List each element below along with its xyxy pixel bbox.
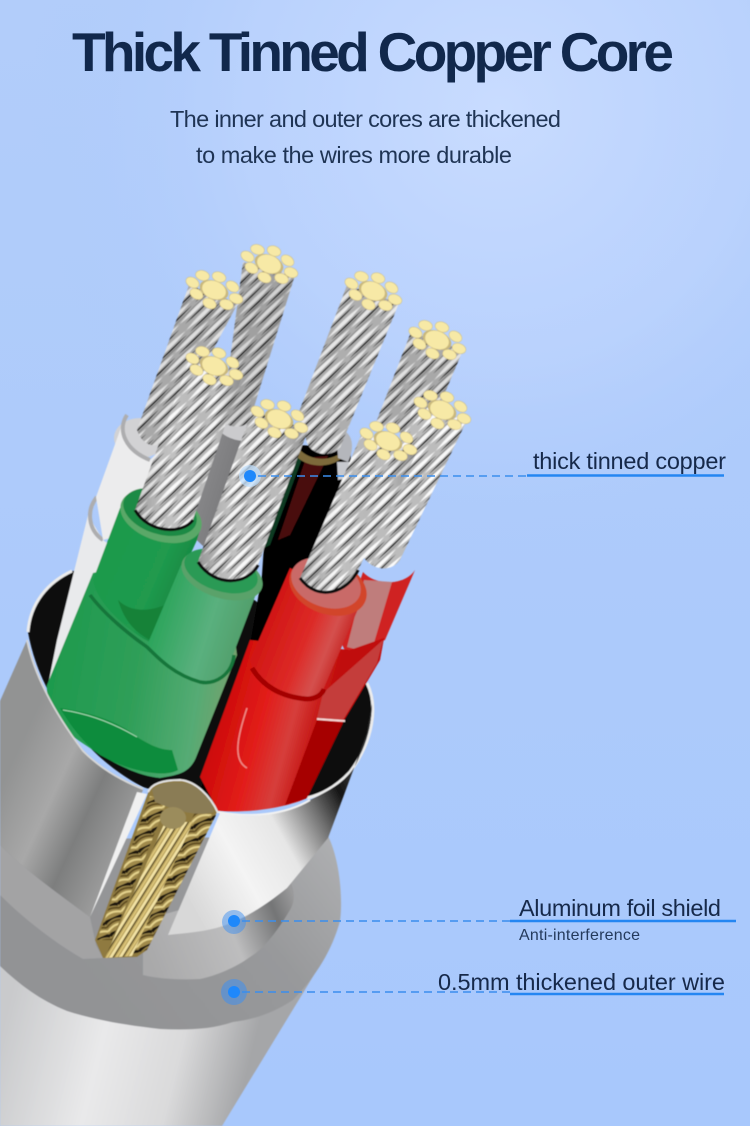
outer jacket body	[0, 955, 317, 1126]
subtitle	[170, 106, 561, 168]
callout: aluminum foil shield: Anti-interference	[519, 927, 640, 944]
callout: thick tinned copper: thick tinned copper	[533, 448, 726, 474]
subtitle: The inner and outer cores are thickened	[170, 106, 561, 132]
exposed gold braid	[95, 780, 218, 958]
marker dot	[239, 465, 261, 487]
callout: outer wire	[221, 969, 725, 1005]
wire 6	[198, 398, 309, 582]
green back sleeve	[93, 479, 209, 642]
red front sleeve	[250, 548, 375, 699]
inner tier left	[0, 845, 103, 959]
red lower shoulder sleeve	[200, 638, 384, 811]
dark core behind wires	[200, 428, 352, 790]
callout: aluminum foil shield: Aluminum foil shield	[519, 895, 721, 921]
back wire 4	[375, 319, 467, 440]
green large shoulder sleeve	[47, 560, 237, 778]
foil left section	[0, 640, 147, 917]
red back sleeve	[323, 570, 415, 690]
callout: aluminum foil shield	[222, 895, 736, 944]
foil right section	[168, 704, 372, 935]
grey inner tube	[186, 411, 262, 560]
callout: outer wire: 0.5mm thickened outer wire	[438, 969, 725, 995]
subtitle: to make the wires more durable	[196, 142, 512, 168]
callout: thick tinned copper	[239, 448, 726, 487]
marker dot	[222, 910, 246, 934]
back wire 2	[137, 269, 244, 445]
back wire 3	[299, 270, 403, 454]
wire 7	[300, 420, 418, 593]
outer wire cut face ring	[0, 836, 341, 1029]
wire 5	[135, 345, 244, 530]
foil interior	[28, 560, 373, 811]
back wire 1	[222, 243, 299, 427]
illustration: cable cross-section	[0, 243, 472, 1126]
green front sleeve	[90, 540, 269, 683]
title: Thick Tinned Copper Core	[72, 21, 674, 83]
white wire sleeves	[47, 415, 166, 700]
marker dot	[221, 979, 247, 1005]
wire 8	[362, 389, 472, 568]
inner tier right	[143, 880, 294, 979]
